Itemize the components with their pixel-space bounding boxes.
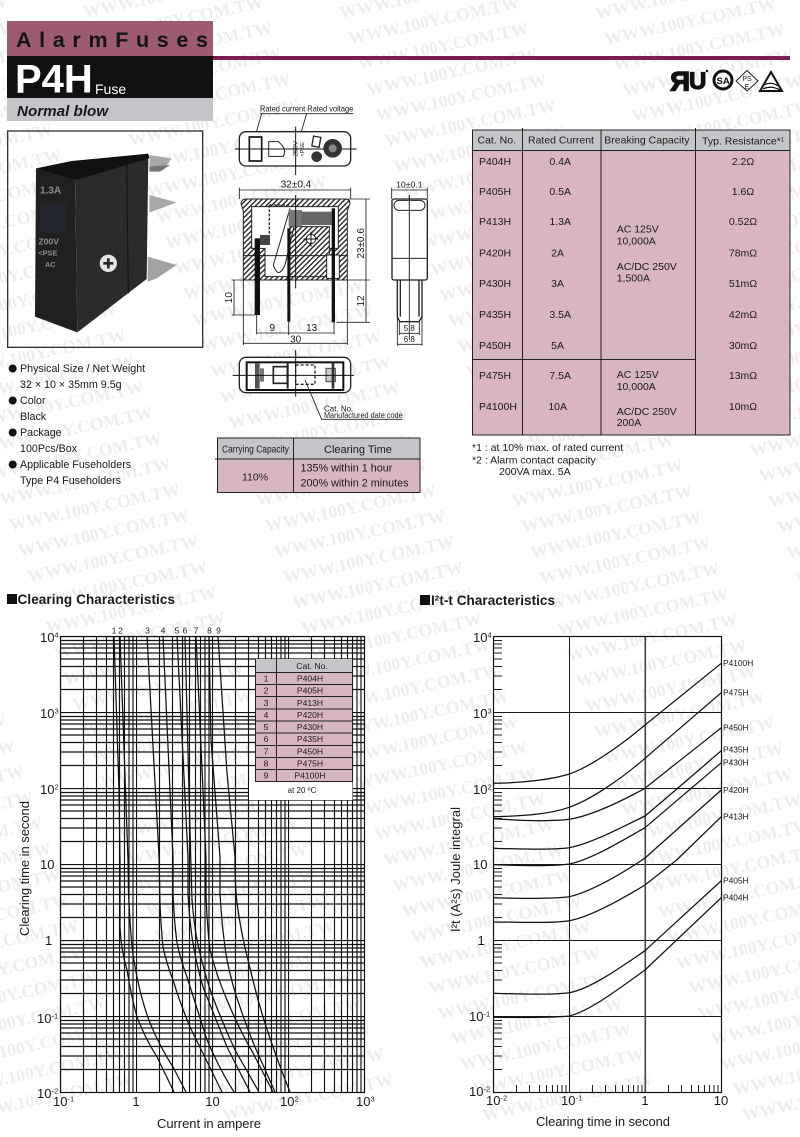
y axis labels: 3 bbox=[487, 706, 492, 716]
legend table: curve numbers: P404H bbox=[297, 674, 323, 684]
header: Alarm Fuses P4H title block bbox=[7, 21, 790, 121]
x axis title: Clearing time in second bbox=[536, 1114, 670, 1129]
heading: Clearing Characteristics: Clearing Characteristics bbox=[18, 592, 175, 607]
column: rated current: 5A bbox=[551, 340, 564, 352]
legend table: curve numbers: P475H bbox=[297, 758, 323, 768]
photo: P4H fuse product picture: Z00V bbox=[38, 236, 59, 246]
x axis labels: 1 bbox=[641, 1093, 649, 1108]
table header: Rated Current bbox=[528, 134, 594, 146]
y axis title: Clearing time in second bbox=[17, 801, 32, 936]
x axis labels: -2 bbox=[500, 1094, 507, 1102]
x axis labels: 10 bbox=[486, 1093, 500, 1108]
y axis labels: 10 bbox=[40, 706, 54, 721]
x axis labels: -1 bbox=[575, 1094, 582, 1102]
column: rated current: 3.5A bbox=[549, 309, 571, 321]
column: typical resistance bbox=[729, 156, 757, 413]
column: rated current: 2A bbox=[551, 248, 564, 260]
icon: UR mark bbox=[670, 66, 708, 96]
specifications list: Black bbox=[20, 411, 47, 423]
diagram: bottom view with date code callout bbox=[233, 350, 403, 420]
y axis labels: -2 bbox=[483, 1084, 490, 1094]
curves: I2t lines bbox=[493, 663, 721, 1018]
legend table: curve numbers: P420H bbox=[297, 710, 323, 720]
legend table: curve numbers: 8 bbox=[264, 758, 269, 768]
x axis labels: 10 bbox=[53, 1094, 67, 1109]
y axis labels: 10 bbox=[40, 630, 54, 645]
legend table: curve numbers: P430H bbox=[297, 722, 323, 732]
column: rated current: 7.5A bbox=[549, 370, 571, 382]
chart: clearing time versus current bbox=[17, 626, 375, 1131]
side view: 10±0.1 bbox=[396, 180, 423, 190]
curve labels: P404H bbox=[723, 892, 749, 902]
icon: UR mark: R bbox=[670, 66, 690, 96]
table: carrying capacity and clearing time: Carrying Capacity bbox=[222, 444, 290, 456]
icon: PSE mark: PS bbox=[742, 76, 752, 83]
y axis title: I²t (A²s) Joule integral bbox=[448, 807, 463, 932]
specifications list: Applicable Fuseholders bbox=[20, 459, 131, 471]
table: carrying capacity and clearing time: Clearing Time bbox=[324, 444, 392, 456]
column: rated current: 10A bbox=[548, 401, 567, 413]
column: category numbers: P404H bbox=[479, 156, 511, 168]
y axis labels: 4 bbox=[54, 630, 59, 640]
legend table: curve numbers: 1 bbox=[264, 674, 269, 684]
y axis labels: 10 bbox=[473, 782, 487, 797]
x axis labels: 3 bbox=[370, 1094, 375, 1104]
y axis labels: 10 bbox=[473, 857, 487, 872]
legend table: curve numbers: P4100H bbox=[294, 770, 326, 780]
x axis labels: 10 bbox=[280, 1094, 294, 1109]
section view bbox=[232, 180, 370, 345]
heading band: AlarmFuses: AlarmFuses bbox=[16, 28, 208, 52]
y axis labels: 1 bbox=[45, 933, 52, 948]
column: typical resistance: 10mΩ bbox=[729, 401, 757, 413]
column: breaking capacity: AC/DC 250V bbox=[617, 261, 677, 273]
x axis labels bbox=[53, 1094, 375, 1109]
column: category numbers: P475H bbox=[479, 370, 511, 382]
y axis labels: 3 bbox=[54, 706, 59, 716]
specifications list: Color bbox=[20, 395, 46, 407]
heading band: AlarmFuses bbox=[7, 21, 213, 56]
column: rated current bbox=[548, 156, 571, 413]
legend table: curve numbers: P435H bbox=[297, 734, 323, 744]
legend table: curve numbers: 4 bbox=[264, 710, 269, 720]
table header bbox=[478, 134, 785, 148]
column: rated current: 0.4A bbox=[549, 156, 571, 168]
rule: maroon header line bbox=[213, 56, 790, 60]
x axis labels: 10 bbox=[714, 1093, 728, 1108]
legend table: curve numbers: Cat. No. bbox=[296, 661, 328, 671]
curve labels: P475H bbox=[723, 688, 749, 698]
y axis labels: -1 bbox=[483, 1010, 490, 1018]
y axis labels: -2 bbox=[51, 1086, 58, 1096]
diagram: dimensional drawing top and section views bbox=[224, 104, 427, 346]
y axis labels bbox=[37, 630, 59, 1101]
side view: 5.8 bbox=[404, 324, 415, 333]
legend table: curve numbers bbox=[249, 659, 352, 800]
curve numbers: 6 bbox=[183, 626, 188, 636]
legend table: curve numbers: P405H bbox=[297, 686, 323, 696]
column: breaking capacity bbox=[617, 224, 677, 429]
x axis labels: 2 bbox=[294, 1094, 299, 1104]
x axis labels: 1 bbox=[132, 1094, 140, 1109]
y axis labels: 10 bbox=[473, 706, 487, 721]
y axis labels: 1 bbox=[478, 933, 485, 948]
column: category numbers: P450H bbox=[479, 340, 511, 352]
heading band: P4H Fuse: P4H bbox=[15, 58, 93, 102]
x axis labels: 10 bbox=[205, 1094, 220, 1109]
dimension labels: 30 bbox=[290, 334, 302, 345]
dimension labels: 12 bbox=[356, 295, 367, 307]
y axis labels: 2 bbox=[54, 782, 59, 792]
heading: I2t-t Characteristics: I²t-t Characteristics bbox=[431, 593, 555, 608]
column: category numbers bbox=[479, 156, 517, 413]
specifications list bbox=[9, 363, 145, 487]
curve numbers: 1 bbox=[112, 626, 117, 636]
icon: UR mark: U bbox=[689, 68, 706, 95]
icons: certification marks bbox=[670, 66, 782, 96]
curve labels bbox=[723, 658, 753, 902]
specifications list: Type P4 Fuseholders bbox=[20, 475, 121, 487]
section view: 32±0.4 bbox=[281, 180, 312, 191]
curve labels: P420H bbox=[723, 785, 749, 795]
legend table: curve numbers: P450H bbox=[297, 746, 323, 756]
dimension labels: 9 bbox=[270, 323, 276, 334]
photo: P4H fuse product picture: <PSE bbox=[38, 249, 57, 258]
footnotes: *1 : at 10% max. of rated current bbox=[472, 442, 623, 454]
callout: rated current and voltage: Rated current Rated voltage bbox=[260, 104, 354, 114]
y axis labels bbox=[469, 630, 492, 1099]
table header: 1 bbox=[781, 138, 785, 144]
heading band: P4H Fuse: Fuse bbox=[95, 81, 126, 97]
table header: Breaking Capacity bbox=[604, 134, 690, 146]
icon: CSA mark: SA bbox=[716, 76, 730, 87]
column: breaking capacity: AC/DC 250V bbox=[617, 406, 677, 418]
y axis labels: 2 bbox=[487, 782, 492, 792]
column: typical resistance: 42mΩ bbox=[729, 309, 757, 321]
photo: P4H fuse product picture: 1.3A bbox=[40, 185, 61, 196]
callout: category number and date code: Manufactured date code bbox=[324, 411, 403, 420]
callout: category number and date code: Cat. No. bbox=[324, 404, 353, 413]
column: category numbers: P435H bbox=[479, 309, 511, 321]
side view: 6.8 bbox=[404, 335, 415, 344]
legend table: curve numbers: 3 bbox=[264, 698, 269, 708]
column: typical resistance: 2.2Ω bbox=[732, 156, 754, 168]
legend table: curve numbers: at 20 ºC bbox=[288, 786, 317, 795]
table: carrying capacity and clearing time: 135% within 1 hour bbox=[300, 462, 393, 474]
y axis labels: 10 bbox=[37, 1086, 51, 1101]
curves: fuse characteristics bbox=[114, 636, 290, 1092]
x axis labels: 10 bbox=[356, 1094, 370, 1109]
curve labels: P435H bbox=[723, 744, 749, 754]
curve numbers: 4 bbox=[161, 626, 166, 636]
curve numbers: 2 bbox=[118, 626, 123, 636]
curve labels: P405H bbox=[723, 876, 749, 886]
heading band: P4H Fuse bbox=[7, 56, 213, 102]
column: breaking capacity: 10,000A bbox=[617, 381, 656, 393]
column: category numbers: P4100H bbox=[479, 401, 517, 413]
specifications list: Package bbox=[20, 427, 62, 439]
column: breaking capacity: AC 125V bbox=[617, 224, 659, 236]
dimension labels: 10 bbox=[224, 292, 235, 303]
column: category numbers: P420H bbox=[479, 248, 511, 260]
callout: rated current and voltage bbox=[255, 104, 354, 138]
chart: I2t versus clearing time bbox=[448, 630, 753, 1129]
legend table: curve numbers: 9 bbox=[264, 770, 269, 780]
callout: category number and date code bbox=[305, 380, 403, 420]
curve numbers: 8 bbox=[207, 626, 212, 636]
column: breaking capacity: AC 125V bbox=[617, 369, 659, 381]
curve labels: P4100H bbox=[723, 658, 753, 668]
x axis labels: -1 bbox=[67, 1094, 74, 1104]
column: rated current: 1.3A bbox=[549, 216, 571, 228]
specifications list: Physical Size / Net Weight bbox=[20, 363, 145, 375]
curve numbers: 5 bbox=[175, 626, 180, 636]
top view: <PSE bbox=[300, 142, 306, 157]
x axis labels bbox=[486, 1093, 728, 1108]
column: breaking capacity: 200A bbox=[617, 417, 641, 429]
column: category numbers: P413H bbox=[479, 216, 511, 228]
table header: Cat. No. bbox=[478, 134, 516, 146]
legend table: curve numbers: 6 bbox=[264, 734, 269, 744]
heading band: Normal blow: Normal blow bbox=[17, 103, 109, 120]
y axis labels: 4 bbox=[487, 630, 492, 640]
legend table: curve numbers: 7 bbox=[264, 746, 269, 756]
specifications list: 32 × 10 × 35mm 9.5g bbox=[20, 379, 122, 391]
table: carrying capacity and clearing time: 110% bbox=[242, 472, 268, 484]
table: ratings by category number bbox=[472, 128, 790, 435]
footnotes: 200VA max. 5A bbox=[499, 466, 571, 478]
y axis labels: 10 bbox=[473, 630, 487, 645]
photo: P4H fuse product picture bbox=[8, 131, 203, 347]
curve numbers: 3 bbox=[145, 626, 150, 636]
y axis labels: 10 bbox=[37, 1011, 51, 1026]
curve numbers: 7 bbox=[194, 626, 199, 636]
dimension labels: 13 bbox=[306, 323, 318, 334]
column: rated current: 3A bbox=[551, 278, 564, 290]
icon: triangle mark bbox=[760, 72, 782, 91]
footnotes: *2 : Alarm contact capacity bbox=[472, 454, 596, 466]
x axis labels: 10 bbox=[561, 1093, 575, 1108]
table: carrying capacity and clearing time bbox=[215, 438, 420, 493]
icon: PSE mark bbox=[736, 70, 758, 91]
legend table: curve numbers: P413H bbox=[297, 698, 323, 708]
legend table: curve numbers: 2 bbox=[264, 686, 269, 696]
photo: P4H fuse product picture: AC bbox=[45, 260, 56, 269]
column: typical resistance: 13mΩ bbox=[729, 370, 757, 382]
top view bbox=[235, 127, 357, 175]
column: typical resistance: 78mΩ bbox=[729, 248, 757, 260]
curve labels: P430H bbox=[723, 758, 749, 768]
y axis labels: 10 bbox=[469, 1084, 483, 1099]
specifications list: 100Pcs/Box bbox=[20, 443, 78, 455]
column: typical resistance: 30mΩ bbox=[729, 340, 757, 352]
curve numbers bbox=[112, 626, 221, 636]
column: rated current: 0.5A bbox=[549, 186, 571, 198]
legend table: curve numbers: 5 bbox=[264, 722, 269, 732]
table header: Typ. Resistance* bbox=[702, 136, 781, 148]
column: typical resistance: 0.52Ω bbox=[729, 216, 757, 228]
curve numbers: 9 bbox=[216, 626, 221, 636]
dimension labels: 23±0.6 bbox=[356, 228, 367, 259]
y axis labels: -1 bbox=[51, 1012, 58, 1020]
top view: 250V bbox=[292, 141, 299, 157]
column: typical resistance: 1.6Ω bbox=[732, 186, 754, 198]
x axis title: Current in ampere bbox=[157, 1116, 261, 1131]
heading band: Normal blow bbox=[7, 98, 213, 121]
table: carrying capacity and clearing time: 200% within 2 minutes bbox=[300, 478, 409, 490]
curve labels: P450H bbox=[723, 722, 749, 732]
y axis labels: 10 bbox=[469, 1009, 483, 1024]
side view bbox=[392, 180, 427, 346]
column: category numbers: P430H bbox=[479, 278, 511, 290]
dimension labels bbox=[224, 228, 367, 345]
footnotes bbox=[472, 442, 623, 478]
column: breaking capacity: 10,000A bbox=[617, 236, 656, 248]
column: breaking capacity: 1,500A bbox=[617, 272, 650, 284]
column: category numbers: P405H bbox=[479, 186, 511, 198]
y axis labels: 10 bbox=[40, 782, 54, 797]
icon: PSE mark: E bbox=[745, 84, 750, 91]
y axis labels: 10 bbox=[40, 857, 54, 872]
curve labels: P413H bbox=[723, 812, 749, 822]
column: typical resistance: 51mΩ bbox=[729, 278, 757, 290]
